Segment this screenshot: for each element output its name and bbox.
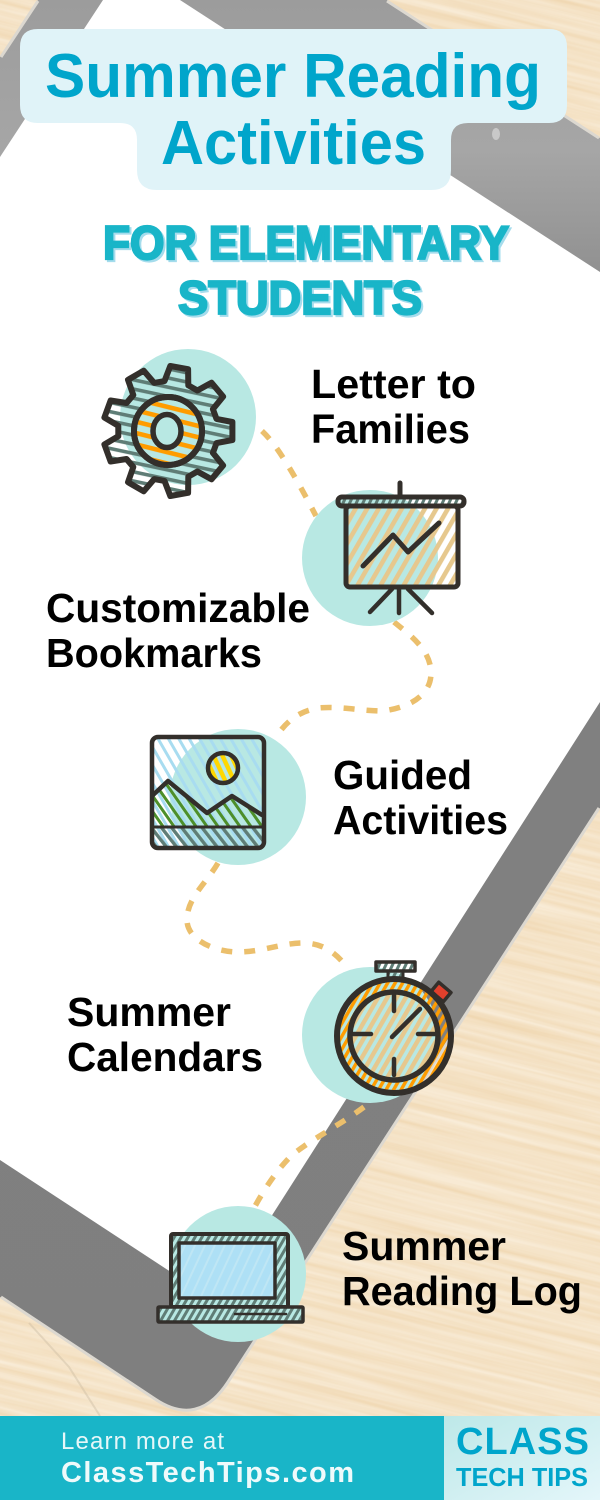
step 1: Letter to Families: Families xyxy=(311,406,470,452)
subtitle: FOR ELEMENTARY xyxy=(103,216,509,269)
step 3: Guided Activities xyxy=(152,729,508,865)
label: Guided xyxy=(333,752,472,798)
logo: Class Tech Tips: TECH TIPS xyxy=(456,1462,588,1492)
step 5: Summer Reading Log: Reading Log xyxy=(342,1268,582,1314)
step 4: Summer Calendars: Calendars xyxy=(67,1034,263,1080)
label: Summer xyxy=(67,989,231,1035)
step 3: Guided Activities: Activities xyxy=(333,797,508,843)
step 1: Letter to Families xyxy=(104,349,476,496)
label: Summer xyxy=(342,1223,506,1269)
icon: stopwatch xyxy=(337,962,451,1093)
footer banner: ClassTechTips.com xyxy=(61,1457,354,1489)
icon: presentation board xyxy=(338,483,464,613)
icon: landscape picture xyxy=(152,737,264,848)
title xyxy=(20,29,567,190)
step 2: Customizable Bookmarks xyxy=(46,483,464,676)
subtitle: STUDENTS xyxy=(178,271,422,324)
subtitle xyxy=(103,216,511,326)
title: Summer Reading xyxy=(45,42,541,111)
footer banner: Learn more at xyxy=(61,1428,224,1455)
icon: gear xyxy=(104,366,232,496)
label: Letter to xyxy=(311,361,476,407)
icon: laptop xyxy=(158,1234,303,1322)
label: Customizable xyxy=(46,585,310,631)
subtitle: STUDENTS xyxy=(180,273,424,326)
step 2: Customizable Bookmarks: Bookmarks xyxy=(46,630,262,676)
step 5: Summer Reading Log xyxy=(158,1206,582,1342)
logo: Class Tech Tips: CLASS xyxy=(456,1421,589,1463)
footer banner xyxy=(0,1416,444,1500)
subtitle: FOR ELEMENTARY xyxy=(105,218,511,271)
dashed connector path xyxy=(187,431,431,1208)
step 4: Summer Calendars xyxy=(67,962,451,1103)
logo: Class Tech Tips xyxy=(444,1416,600,1500)
title: Activities xyxy=(161,109,426,178)
